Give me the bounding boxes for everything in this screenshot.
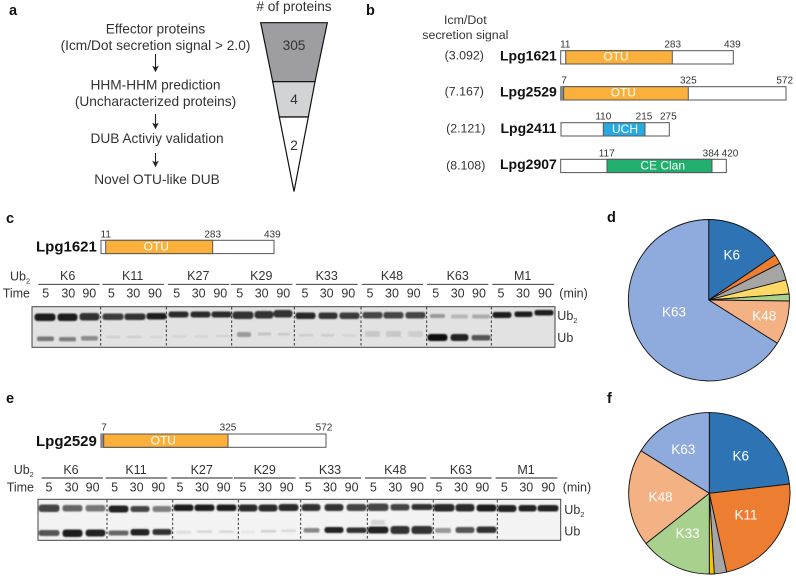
gel header labels: 30 bbox=[255, 287, 269, 301]
gel header labels: K48 bbox=[384, 463, 406, 477]
step: HHM-HHM prediction: HHM-HHM prediction bbox=[90, 78, 221, 92]
gel header labels: 30 bbox=[519, 480, 533, 494]
gel header labels: 30 bbox=[323, 480, 337, 494]
secretion signal heading: secretion signal bbox=[422, 28, 508, 42]
gel header labels: 90 bbox=[151, 480, 165, 494]
gel header labels: M1 bbox=[514, 269, 531, 283]
pie slices f: K33 bbox=[676, 526, 700, 541]
panel e: Lpg2529 gel bbox=[6, 391, 591, 540]
Lpg2529 domain bar: 325 bbox=[220, 423, 237, 434]
row: Lpg2907: Lpg2907 bbox=[500, 156, 557, 172]
gel header labels: 90 bbox=[345, 480, 359, 494]
gel header labels: M1 bbox=[517, 463, 535, 477]
gel header labels: 90 bbox=[410, 480, 424, 494]
gel header labels: K27 bbox=[191, 463, 213, 477]
step: effector proteins: (Icm/Dot secretion signal > 2.0) bbox=[61, 38, 250, 53]
pie slices f: K11 bbox=[734, 507, 758, 522]
row: Lpg2907 bbox=[446, 149, 739, 173]
gel header labels: Ub bbox=[10, 269, 26, 283]
Lpg2529 domain bar: 7 bbox=[101, 423, 107, 434]
row: Lpg2411 bbox=[446, 112, 677, 136]
gel header labels: K29 bbox=[250, 269, 272, 283]
gel header labels: K6 bbox=[60, 269, 75, 283]
gel header labels: 90 bbox=[538, 287, 552, 301]
row: Lpg2529: (7.167) bbox=[445, 85, 484, 99]
arrow bbox=[154, 54, 156, 69]
gel header labels: 90 bbox=[148, 287, 162, 301]
Lpg1621 domain bar: 11 bbox=[101, 230, 111, 241]
gel header labels: 30 bbox=[320, 287, 334, 301]
panel d: pie chart Lpg1621 bbox=[607, 210, 789, 381]
funnel chart: 2 bbox=[290, 138, 298, 153]
row: Lpg2411: 110 bbox=[595, 112, 612, 123]
gel header labels: 2 bbox=[26, 276, 30, 285]
gel header labels: 5 bbox=[436, 480, 443, 494]
row: Lpg2907: (8.108) bbox=[446, 159, 485, 173]
panel letter d: d bbox=[607, 210, 616, 226]
secretion signal heading: Icm/Dot bbox=[444, 13, 487, 27]
gel header labels: 5 bbox=[111, 480, 118, 494]
panel letter e: e bbox=[6, 391, 14, 407]
step: HHM-HHM prediction: (Uncharacterized proteins) bbox=[75, 94, 236, 109]
gel header labels: 90 bbox=[475, 480, 489, 494]
gel header labels: 5 bbox=[370, 480, 377, 494]
row: Lpg2411: 215 bbox=[636, 112, 653, 123]
gel band labels e: Ub bbox=[564, 503, 580, 517]
gel image c bbox=[32, 307, 555, 347]
row: Lpg1621: (3.092) bbox=[445, 48, 484, 62]
gel header labels: 2 bbox=[30, 470, 34, 479]
gel header labels bbox=[3, 269, 588, 301]
pie slices f: K63 bbox=[671, 442, 695, 457]
pie slices d: K6 bbox=[723, 247, 740, 262]
gel header labels: 5 bbox=[46, 480, 53, 494]
panel c: Lpg1621 gel bbox=[3, 211, 588, 347]
row: Lpg2529: OTU bbox=[611, 86, 636, 100]
gel header labels: 90 bbox=[341, 287, 355, 301]
Lpg1621 domain bar: 439 bbox=[264, 230, 281, 241]
panel f: pie chart Lpg2529 bbox=[607, 391, 790, 574]
row: Lpg2529: 7 bbox=[561, 75, 567, 86]
gel header labels: 5 bbox=[501, 480, 508, 494]
row: Lpg2411: (2.121) bbox=[446, 122, 485, 136]
gel header labels: 5 bbox=[367, 287, 374, 301]
gel header labels: K63 bbox=[447, 269, 469, 283]
Lpg1621 domain bar: 283 bbox=[204, 230, 221, 241]
gel header labels: 90 bbox=[276, 287, 290, 301]
gel header labels: 30 bbox=[451, 287, 465, 301]
row: Lpg2411: 275 bbox=[660, 112, 677, 123]
row: Lpg2529: Lpg2529 bbox=[500, 84, 557, 100]
row: Lpg1621: 11 bbox=[560, 40, 571, 51]
gel header labels: 90 bbox=[86, 480, 100, 494]
panel letter f: f bbox=[607, 391, 612, 407]
funnel chart bbox=[261, 23, 327, 192]
panel letter c: c bbox=[6, 211, 14, 227]
row: Lpg1621 bbox=[445, 40, 741, 64]
gel header labels: 5 bbox=[498, 287, 505, 301]
pie slices f bbox=[629, 413, 790, 574]
gel header labels: 90 bbox=[213, 287, 227, 301]
gel header labels: 5 bbox=[432, 287, 439, 301]
gel header labels: 30 bbox=[65, 480, 79, 494]
row: Lpg2411: Lpg2411 bbox=[500, 120, 557, 136]
gel header labels: Ub bbox=[14, 463, 30, 477]
gel header labels: K27 bbox=[187, 269, 209, 283]
gel header labels: (min) bbox=[559, 287, 588, 301]
gel band labels c bbox=[557, 309, 577, 345]
panel letter a: a bbox=[9, 3, 18, 19]
gel header labels: 30 bbox=[126, 287, 140, 301]
row: Lpg1621: Lpg1621 bbox=[500, 48, 557, 64]
gel header labels: K29 bbox=[254, 463, 276, 477]
gel header labels: Time bbox=[3, 287, 30, 301]
arrow bbox=[154, 114, 156, 126]
gel header labels: 5 bbox=[173, 287, 180, 301]
panel letter b: b bbox=[366, 3, 375, 19]
step: effector proteins: Effector proteins bbox=[106, 22, 205, 36]
row: Lpg2529: 572 bbox=[776, 75, 793, 86]
arrow bbox=[154, 153, 156, 164]
funnel chart: 4 bbox=[290, 92, 298, 107]
gel header labels: 30 bbox=[516, 287, 530, 301]
panel b: domain architectures bbox=[366, 3, 793, 173]
row: Lpg2907: 384 bbox=[703, 149, 720, 160]
row: Lpg2529 bbox=[445, 75, 793, 100]
Lpg2529 domain bar: Lpg2529 bbox=[36, 433, 97, 450]
gel header labels bbox=[7, 463, 591, 494]
gel band labels c: Ub bbox=[557, 331, 573, 345]
gel header labels: 30 bbox=[385, 287, 399, 301]
row: Lpg2907: 117 bbox=[599, 149, 615, 160]
gel header labels: 5 bbox=[302, 287, 309, 301]
gel header labels: Time bbox=[7, 480, 34, 494]
gel header labels: 5 bbox=[42, 287, 49, 301]
pie slices d: K48 bbox=[752, 309, 776, 324]
gel band labels c: 2 bbox=[573, 316, 577, 325]
gel header labels: K11 bbox=[122, 269, 143, 283]
gel header labels: 5 bbox=[177, 480, 184, 494]
gel header labels: 90 bbox=[217, 480, 231, 494]
Lpg2529 domain bar: 572 bbox=[316, 423, 333, 434]
row: Lpg2907: 420 bbox=[722, 149, 739, 160]
gel header labels: 30 bbox=[454, 480, 468, 494]
Lpg2529 domain bar bbox=[36, 423, 333, 450]
pie slices f: K48 bbox=[649, 490, 673, 505]
gel header labels: 5 bbox=[108, 287, 115, 301]
row: Lpg1621: 283 bbox=[664, 40, 681, 51]
row: Lpg2907: CE Clan bbox=[640, 158, 685, 172]
gel image e bbox=[38, 499, 561, 540]
gel header labels: 5 bbox=[236, 287, 243, 301]
gel header labels: 30 bbox=[192, 287, 206, 301]
step: DUB validation: DUB Activiy validation bbox=[90, 131, 224, 146]
gel header labels: K6 bbox=[63, 463, 79, 477]
gel header labels: 90 bbox=[280, 480, 294, 494]
gel header labels: 90 bbox=[407, 287, 421, 301]
row: Lpg2411: UCH bbox=[612, 122, 638, 136]
panel a: effector selection funnel bbox=[9, 0, 332, 192]
row: Lpg1621: 439 bbox=[724, 40, 741, 51]
pie slices d bbox=[628, 220, 789, 381]
gel header labels: 30 bbox=[130, 480, 144, 494]
gel band labels e: Ub bbox=[564, 524, 580, 538]
Lpg1621 domain bar: OTU bbox=[144, 240, 169, 254]
gel header labels: 30 bbox=[258, 480, 272, 494]
Lpg1621 domain bar bbox=[36, 230, 281, 256]
gel header labels: 30 bbox=[61, 287, 75, 301]
gel header labels: K11 bbox=[125, 463, 147, 477]
gel header labels: 90 bbox=[82, 287, 96, 301]
gel band labels e bbox=[564, 503, 584, 538]
gel header labels: 5 bbox=[305, 480, 312, 494]
gel header labels: 90 bbox=[472, 287, 486, 301]
gel header labels: K33 bbox=[319, 463, 341, 477]
gel header labels: 90 bbox=[541, 480, 555, 494]
gel header labels: 30 bbox=[388, 480, 402, 494]
gel band labels c: Ub bbox=[557, 309, 573, 323]
row: Lpg2529: 325 bbox=[680, 75, 697, 86]
step: novel OTU-like DUB: Novel OTU-like DUB bbox=[94, 172, 220, 187]
gel header labels: 30 bbox=[195, 480, 209, 494]
gel header labels: (min) bbox=[563, 480, 591, 494]
gel band labels e: 2 bbox=[580, 510, 584, 519]
gel header labels: K33 bbox=[316, 269, 338, 283]
Lpg2529 domain bar: OTU bbox=[151, 433, 176, 447]
Lpg1621 domain bar: Lpg1621 bbox=[36, 239, 97, 256]
row: Lpg1621: OTU bbox=[603, 50, 629, 64]
funnel chart: 305 bbox=[283, 38, 306, 53]
gel header labels: K63 bbox=[450, 463, 472, 477]
pie slices f: K6 bbox=[732, 449, 749, 464]
pie slices d: K63 bbox=[662, 305, 686, 320]
gel header labels: K48 bbox=[381, 269, 403, 283]
gel header labels: 5 bbox=[240, 480, 247, 494]
